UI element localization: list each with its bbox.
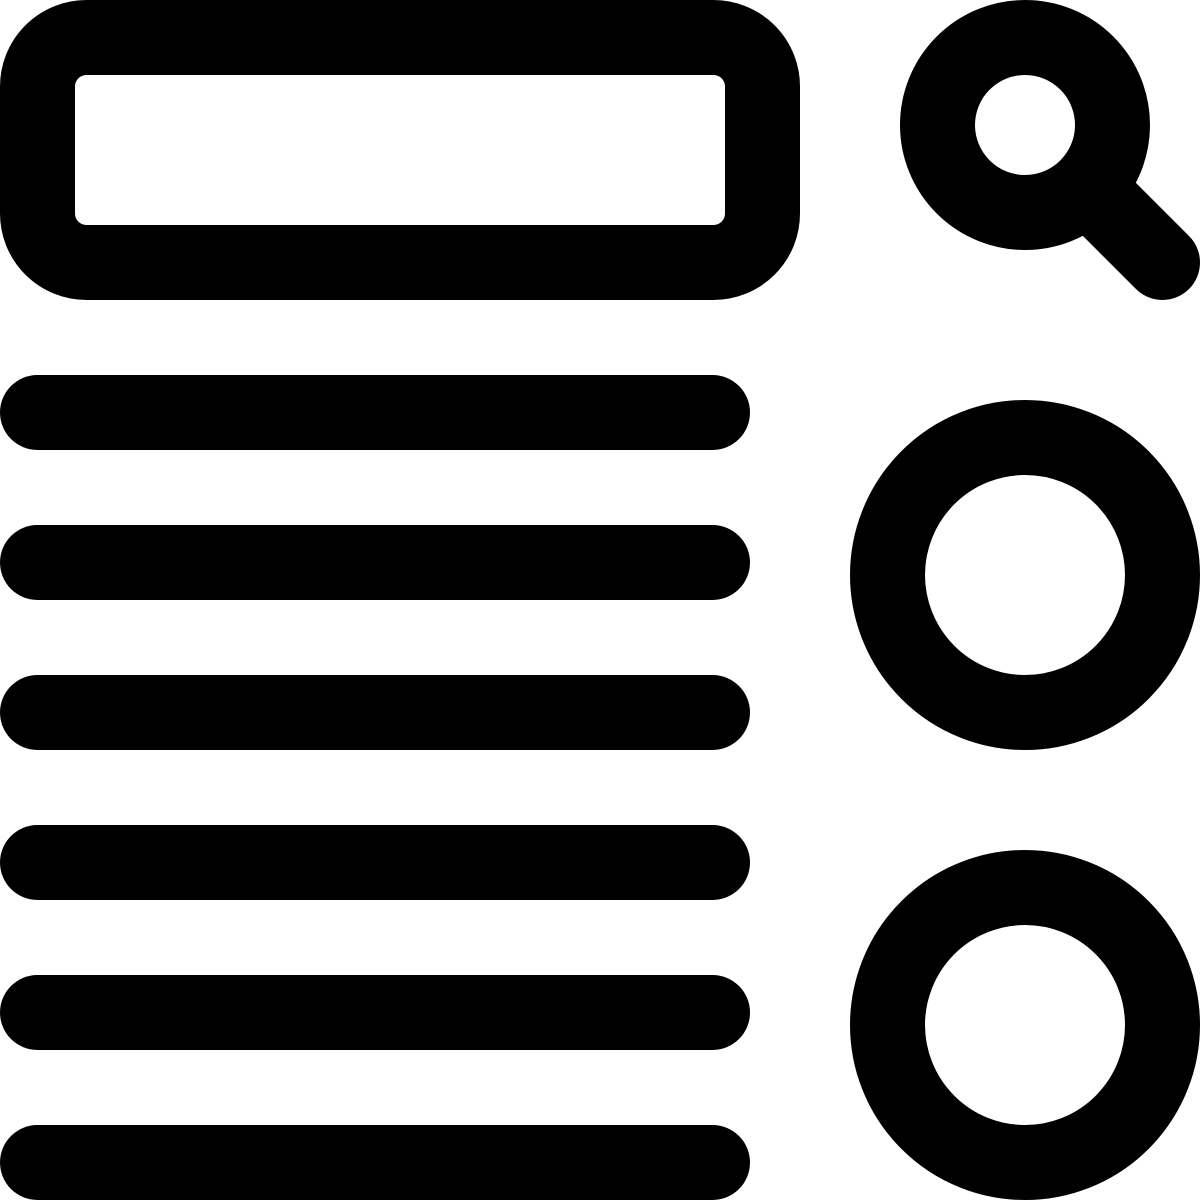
lower ring (888, 888, 1162, 1162)
result lines (38, 412, 712, 1162)
icon: magnifying glass (938, 38, 1162, 262)
search input box (38, 38, 762, 262)
upper ring (888, 438, 1162, 712)
